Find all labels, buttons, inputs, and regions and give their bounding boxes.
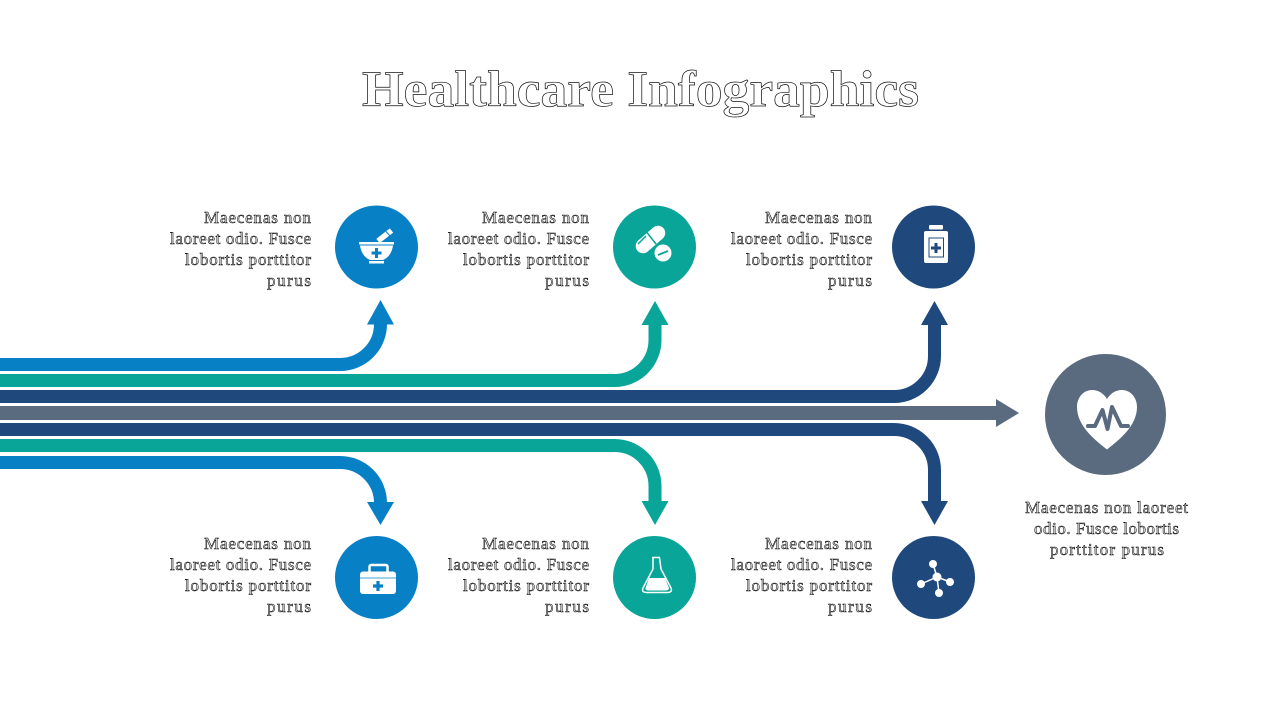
text block: lobortis porttitor	[185, 250, 311, 269]
arrow: blue down	[0, 462, 394, 525]
text block: purus	[545, 597, 589, 616]
panel: top item 2	[448, 206, 696, 290]
text block	[448, 534, 590, 616]
title: Healthcare Infographics	[362, 62, 919, 118]
text block	[731, 208, 872, 290]
text block: Maecenas non laoreet	[1025, 498, 1188, 517]
arrow: teal up	[0, 301, 668, 380]
panel: bottom item 1	[170, 534, 418, 619]
arrow: teal down	[0, 445, 668, 525]
text block: laoreet odio. Fusce	[731, 555, 872, 574]
text block: lobortis porttitor	[463, 576, 589, 595]
text block: Maecenas non	[204, 534, 312, 553]
text block: laoreet odio. Fusce	[448, 555, 589, 574]
text block	[731, 534, 872, 616]
arrow: navy down	[0, 430, 948, 525]
text block	[170, 534, 312, 616]
icon: heart with pulse	[1045, 354, 1166, 475]
text block: purus	[828, 597, 872, 616]
icon: pills	[613, 206, 696, 288]
text block: purus	[828, 271, 872, 290]
panel: top item 3	[731, 206, 975, 290]
text block: lobortis porttitor	[746, 250, 872, 269]
text block: Maecenas non	[765, 534, 872, 553]
arrow: gray centre arrow	[0, 399, 1019, 427]
icon: medicine bottle	[892, 206, 975, 288]
icon: mortar and pestle	[335, 206, 418, 288]
icon: molecule	[892, 536, 975, 619]
text block: lobortis porttitor	[463, 250, 589, 269]
text block: odio. Fusce lobortis	[1034, 519, 1179, 538]
text block: purus	[267, 597, 311, 616]
text block: laoreet odio. Fusce	[448, 229, 589, 248]
text block: purus	[267, 271, 311, 290]
arrow: blue up	[0, 300, 394, 364]
icon: flask	[613, 536, 696, 619]
text block: purus	[545, 271, 589, 290]
text block: Maecenas non	[204, 208, 312, 227]
text block: porttitor purus	[1050, 540, 1164, 559]
panel: top item 1	[170, 206, 418, 290]
panel: bottom item 3	[731, 534, 975, 619]
text block	[170, 208, 312, 290]
text block: lobortis porttitor	[185, 576, 311, 595]
text block: laoreet odio. Fusce	[731, 229, 872, 248]
icon: first aid kit	[335, 536, 418, 619]
panel: final outcome	[1025, 354, 1188, 559]
text block: laoreet odio. Fusce	[170, 229, 311, 248]
text block	[448, 208, 590, 290]
text block	[1025, 498, 1188, 559]
panel: bottom item 2	[448, 534, 696, 619]
text block: Maecenas non	[765, 208, 872, 227]
text block: Maecenas non	[482, 534, 590, 553]
text block: laoreet odio. Fusce	[170, 555, 311, 574]
arrow: navy up	[0, 301, 948, 396]
text block: Maecenas non	[482, 208, 590, 227]
text block: lobortis porttitor	[746, 576, 872, 595]
